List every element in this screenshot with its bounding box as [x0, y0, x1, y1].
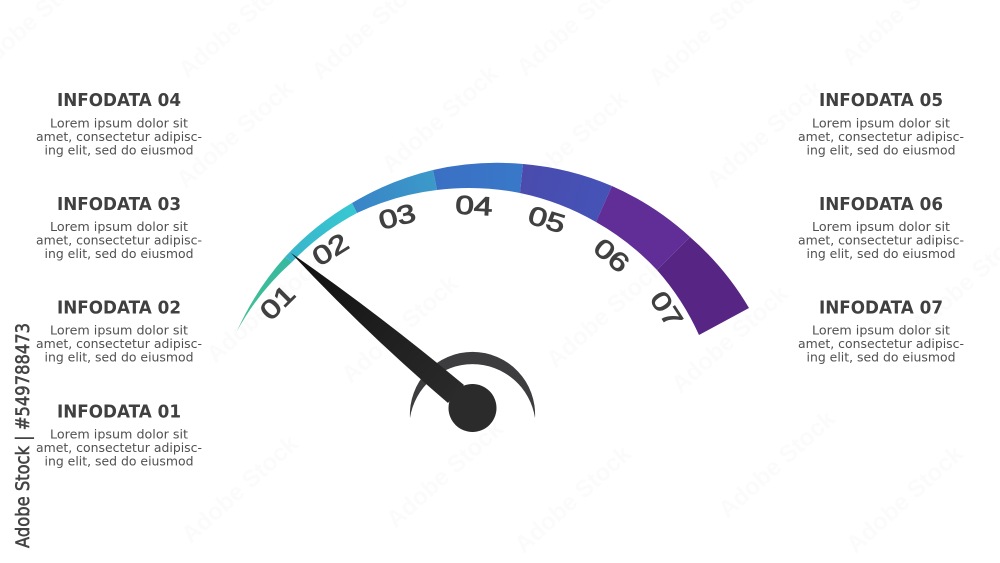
watermark: Adobe Stock: [841, 440, 969, 559]
watermark: Adobe Stock: [336, 270, 464, 389]
gauge arc: [237, 163, 749, 335]
infodata 06: [798, 194, 964, 261]
infodata 07: ing elit, sed do eiusmod: [806, 350, 956, 364]
infodata 04: [36, 90, 202, 158]
infodata 03: Lorem ipsum dolor sit: [50, 219, 188, 234]
infodata 05: amet, consectetur adipisc-: [798, 129, 964, 144]
infodata 01: Lorem ipsum dolor sit: [50, 426, 188, 442]
infodata 01: [36, 402, 202, 468]
number 05: 05: [525, 201, 569, 239]
segment 07: [657, 237, 749, 335]
infodata 03: [36, 194, 202, 261]
infodata 04: INFODATA 04: [57, 90, 181, 111]
infodata 01: ing elit, sed do eiusmod: [44, 454, 194, 468]
infodata 02: [36, 298, 202, 364]
infodata 06: Lorem ipsum dolor sit: [812, 219, 950, 234]
number 07: 07: [644, 286, 688, 333]
infodata 02: Lorem ipsum dolor sit: [50, 322, 188, 338]
segment 05: [520, 164, 612, 222]
infodata 05: ing elit, sed do eiusmod: [806, 142, 956, 158]
infodata 06: amet, consectetur adipisc-: [798, 232, 964, 248]
watermark: Adobe Stock: [381, 415, 509, 534]
infodata 02: ing elit, sed do eiusmod: [44, 350, 194, 364]
watermark: Adobe Stock: [701, 75, 829, 194]
watermark: Adobe Stock: [201, 250, 329, 369]
watermark: Adobe Stock: [541, 255, 669, 374]
infodata 02: amet, consectetur adipisc-: [36, 336, 202, 351]
gauge crescent: [410, 352, 535, 418]
infodata 02: INFODATA 02: [57, 298, 181, 318]
infodata 01: amet, consectetur adipisc-: [36, 440, 202, 455]
panel: right column: [798, 90, 964, 364]
watermark: Adobe Stock: [176, 430, 304, 549]
infodata 07: INFODATA 07: [819, 298, 943, 318]
infodata 05: INFODATA 05: [819, 90, 943, 111]
stock credit: Adobe Stock | #549788473: [12, 323, 34, 548]
watermark: Adobe Stock: [171, 75, 299, 194]
scale numbers: [255, 191, 688, 333]
watermark: Adobe Stock: [506, 85, 634, 204]
segment 02: [285, 203, 357, 262]
infodata 07: [798, 298, 964, 364]
segment 04: [433, 163, 523, 193]
segment 01: [237, 257, 292, 331]
number 02: 02: [307, 228, 354, 272]
infodata 04: Lorem ipsum dolor sit: [50, 116, 188, 130]
number 01: 01: [255, 280, 301, 326]
watermark: Adobe Stock: [713, 405, 841, 524]
infodata 06: INFODATA 06: [819, 194, 943, 215]
infodata 05: Lorem ipsum dolor sit: [812, 116, 950, 130]
infodata 07: Lorem ipsum dolor sit: [812, 322, 950, 338]
infodata 03: ing elit, sed do eiusmod: [44, 246, 194, 261]
number 06: 06: [588, 233, 635, 279]
needle hub: [448, 384, 496, 432]
infodata 03: INFODATA 03: [57, 194, 181, 215]
infodata 07: amet, consectetur adipisc-: [798, 336, 964, 351]
needle: [291, 253, 464, 403]
infodata 06: ing elit, sed do eiusmod: [806, 246, 956, 261]
infodata 03: amet, consectetur adipisc-: [36, 232, 202, 248]
segment 03: [352, 170, 437, 213]
segment 06: [596, 186, 690, 270]
panel: left column: [36, 90, 202, 468]
watermark: Adobe Stock: [509, 440, 637, 559]
infodata 04: amet, consectetur adipisc-: [36, 129, 202, 144]
infodata 01: INFODATA 01: [57, 402, 181, 422]
number 03: 03: [376, 199, 419, 236]
number 04: 04: [455, 191, 493, 222]
infodata 04: ing elit, sed do eiusmod: [44, 142, 194, 158]
watermark: Adobe Stock: [376, 60, 504, 179]
watermark: Adobe Stock: [666, 280, 794, 399]
infodata 05: [798, 90, 964, 158]
